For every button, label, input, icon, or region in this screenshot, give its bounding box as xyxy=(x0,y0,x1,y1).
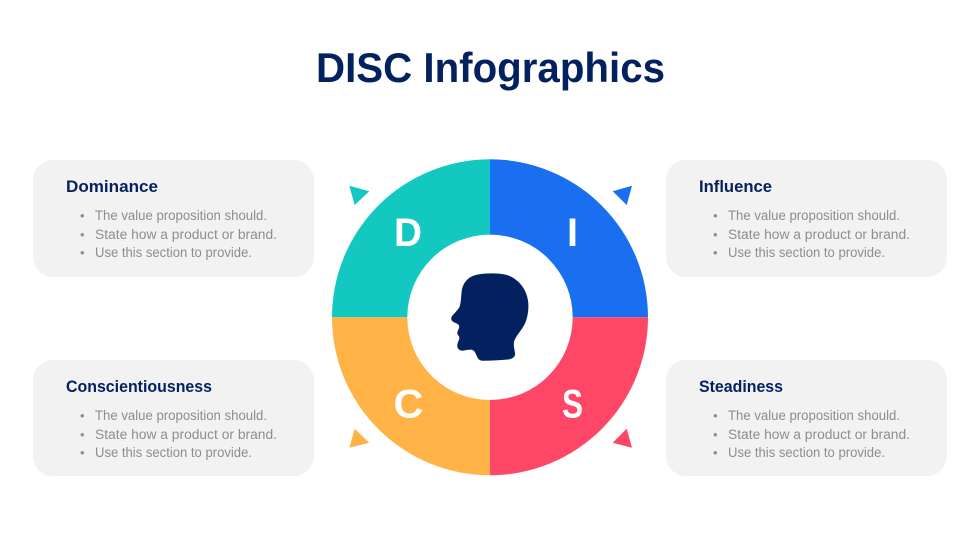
panel: Influence: Influence xyxy=(699,177,772,196)
icon: head silhouette xyxy=(451,273,528,361)
panel: Influence xyxy=(666,160,947,277)
panel: Steadiness: The value proposition should. xyxy=(728,408,900,423)
letter D: D xyxy=(394,211,422,255)
letter C: C xyxy=(394,382,424,426)
arrow: S xyxy=(613,429,632,448)
panel: Conscientiousness: The value proposition should. xyxy=(95,408,267,423)
segment: C xyxy=(332,317,490,475)
panel: Steadiness: Use this section to provide. xyxy=(728,445,885,460)
circular DISC chart xyxy=(332,159,648,475)
panel: Conscientiousness: State how a product or brand. xyxy=(95,427,277,442)
panel: Influence: State how a product or brand. xyxy=(728,227,910,242)
segment: D xyxy=(332,159,490,317)
panel: Steadiness: • xyxy=(713,445,718,460)
panel: Steadiness: Steadiness xyxy=(699,377,783,396)
panel: Conscientiousness xyxy=(33,360,314,476)
segment: I xyxy=(490,159,648,317)
panel: Influence: Use this section to provide. xyxy=(728,245,885,260)
panel: Steadiness: State how a product or brand. xyxy=(728,427,910,442)
panel: Influence: • xyxy=(713,208,718,223)
panel: Steadiness: • xyxy=(713,408,718,423)
panel: Conscientiousness: Use this section to provide. xyxy=(95,445,252,460)
arrow: I xyxy=(613,186,632,205)
panel: Dominance: Use this section to provide. xyxy=(95,245,252,260)
segment: S xyxy=(490,317,648,475)
panel: Dominance: State how a product or brand. xyxy=(95,227,277,242)
panel: Steadiness: • xyxy=(713,427,718,442)
panel: Conscientiousness: Conscientiousness xyxy=(66,377,212,396)
panel: Influence: • xyxy=(713,227,718,242)
arrow: D xyxy=(349,186,369,205)
panel: Dominance: • xyxy=(80,245,85,260)
panel: Dominance: • xyxy=(80,227,85,242)
panel: Conscientiousness: • xyxy=(80,427,85,442)
panel: Conscientiousness: • xyxy=(80,408,85,423)
arrow: C xyxy=(349,429,369,448)
letter I: I xyxy=(567,211,578,255)
panel: Dominance: • xyxy=(80,208,85,223)
panel: Influence: • xyxy=(713,245,718,260)
panel: Dominance xyxy=(33,160,314,277)
panel: Dominance: Dominance xyxy=(66,177,158,196)
panel: Steadiness xyxy=(666,360,947,476)
panel: Conscientiousness: • xyxy=(80,445,85,460)
panel: Dominance: The value proposition should. xyxy=(95,208,267,223)
title: DISC Infographics xyxy=(316,44,665,91)
panel: Influence: The value proposition should. xyxy=(728,208,900,223)
letter S: S xyxy=(562,382,583,426)
